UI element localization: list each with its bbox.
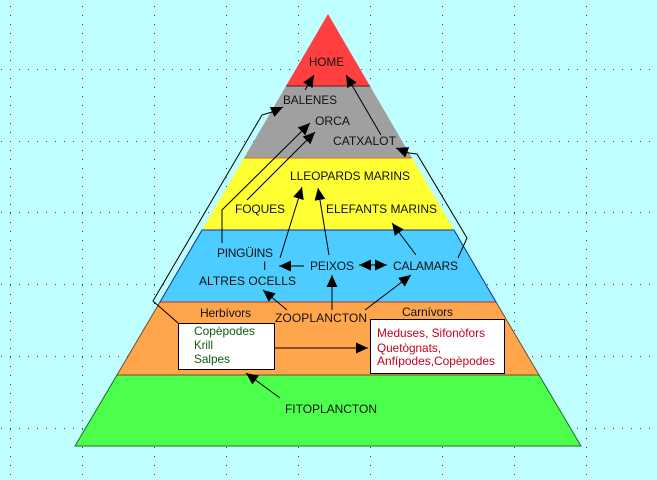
box: carnivores: Anfípodes,Copèpodes — [377, 354, 495, 368]
box: carnivores — [370, 320, 504, 374]
labels: ORCA — [315, 114, 350, 128]
band: green, phytoplankton — [75, 375, 581, 446]
labels: FOQUES — [235, 202, 285, 216]
band: red, top — [286, 14, 370, 86]
labels: ALTRES OCELLS — [199, 274, 296, 288]
labels: FITOPLANCTON — [285, 402, 377, 416]
band: orange, zooplankton — [117, 302, 539, 375]
labels: LLEOPARDS MARINS — [290, 169, 410, 183]
box: herbivores — [178, 324, 274, 370]
pyramid — [75, 14, 581, 446]
labels: PINGÜINS — [217, 246, 273, 260]
labels: CATXALOT — [333, 134, 397, 148]
band: grey — [244, 86, 412, 158]
labels: ELEFANTS MARINS — [326, 202, 437, 216]
band: blue — [160, 230, 496, 302]
box: carnivores: Quetògnats, — [377, 341, 441, 355]
labels: CALAMARS — [393, 259, 458, 273]
labels: Herbívors — [200, 306, 251, 320]
labels: BALENES — [283, 93, 337, 107]
arrows — [153, 75, 467, 398]
labels: ZOOPLANCTON — [275, 311, 367, 325]
labels: I — [263, 259, 266, 273]
labels — [199, 55, 458, 416]
box: herbivores: Copèpodes — [194, 324, 255, 338]
labels: HOME — [309, 55, 344, 69]
box: herbivores: Krill — [194, 338, 213, 352]
box: herbivores: Salpes — [194, 352, 230, 366]
band: yellow — [202, 158, 454, 230]
labels: PEIXOS — [310, 259, 354, 273]
labels: Carnívors — [402, 305, 453, 319]
box: carnivores: Meduses, Sifonòfors — [377, 326, 485, 340]
